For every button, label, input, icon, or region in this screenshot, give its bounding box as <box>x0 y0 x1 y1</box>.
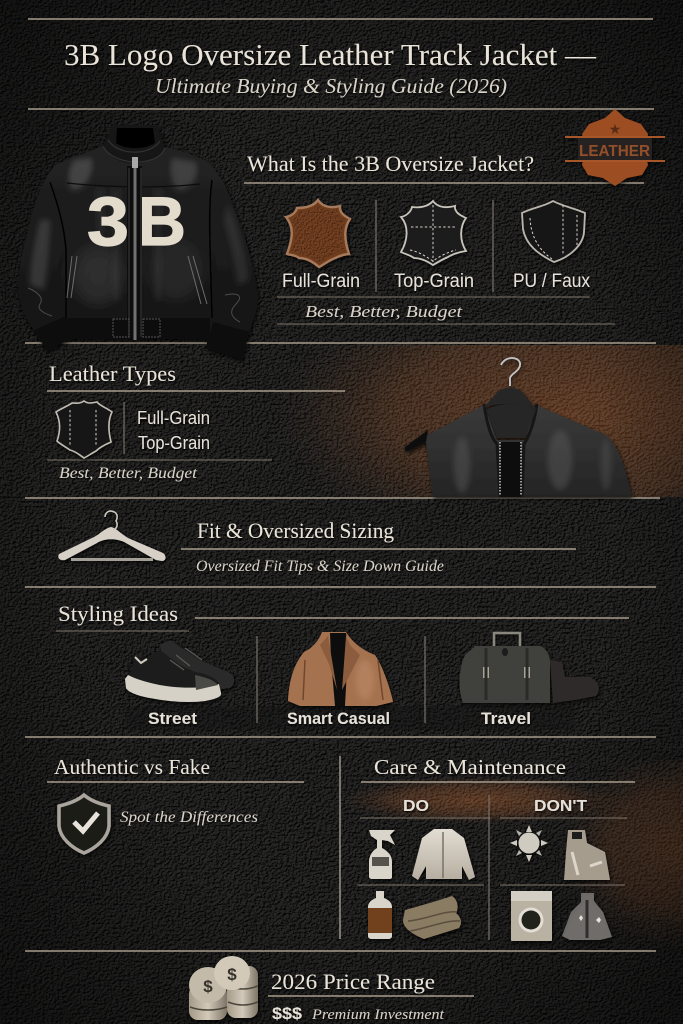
icon: coin stacks: $ <box>203 977 213 996</box>
leather types list <box>56 401 210 458</box>
label: travel: Travel <box>481 709 531 728</box>
icon: plastic cover <box>562 893 612 940</box>
caption: best better budget: Best, Better, Budget <box>59 465 198 482</box>
heading: price range: 2026 Price Range <box>271 969 435 994</box>
leather badge: LEATHER <box>579 143 650 160</box>
styling ideas row <box>125 632 599 730</box>
heading: care and maintenance: Care & Maintenance <box>374 755 566 779</box>
icon: check shield <box>59 795 109 853</box>
icon: plastic bag <box>564 830 610 880</box>
heading: styling ideas: Styling Ideas <box>58 601 178 626</box>
label: full-grain: Full-Grain <box>282 271 360 292</box>
icon: folded towel <box>403 896 461 939</box>
care grid <box>357 795 627 941</box>
label: pu faux: PU / Faux <box>513 271 590 292</box>
3B logo <box>87 183 186 260</box>
caption: fit tips: Oversized Fit Tips & Size Down Guide <box>196 558 444 575</box>
label: top-grain: Top-Grain <box>394 271 474 292</box>
heading: what is the jacket: What Is the 3B Oversize Jacket? <box>247 151 534 176</box>
icon: washing machine <box>511 891 552 941</box>
icon: sun <box>510 825 548 862</box>
icon: PU faux shield <box>522 201 585 262</box>
icon: coin stacks <box>189 956 258 1020</box>
label: street: Street <box>148 709 197 728</box>
icon: tan blazer <box>288 632 393 706</box>
icon: duffel bag <box>459 633 599 703</box>
label: full-grain: Full-Grain <box>137 408 210 428</box>
3B logo: B <box>137 183 186 260</box>
caption: best better budget: Best, Better, Budget <box>305 302 463 321</box>
jacket on hanger <box>405 358 632 497</box>
icon: conditioner bottle <box>368 891 392 939</box>
leather type icons row <box>282 200 590 292</box>
heading: leather types: Leather Types <box>49 361 176 386</box>
icon: full-grain hide <box>286 200 350 267</box>
price symbols: $$$ <box>272 1004 303 1023</box>
title <box>64 37 597 98</box>
label: smart casual: Smart Casual <box>287 709 390 728</box>
heading: fit and sizing: Fit & Oversized Sizing <box>197 518 394 543</box>
icon: sneakers <box>125 640 234 702</box>
label: top-grain: Top-Grain <box>138 433 210 453</box>
icon: spray bottle <box>369 830 395 879</box>
icon: light jacket <box>412 829 475 880</box>
leather jacket with 3B logo <box>18 125 258 360</box>
icon: top-grain hide <box>401 201 466 265</box>
label: don't: DON'T <box>534 798 587 815</box>
icon: coin stacks: $ <box>227 965 237 984</box>
subtitle: Ultimate Buying & Styling Guide (2026) <box>155 74 507 98</box>
leather badge <box>565 109 665 186</box>
title: 3B Logo Oversize Leather Track Jacket — <box>64 37 597 72</box>
caption: premium investment: Premium Investment <box>311 1007 445 1023</box>
heading: authentic vs fake: Authentic vs Fake <box>54 755 210 779</box>
caption: spot the differences: Spot the Differences <box>120 809 258 826</box>
leather badge: ★ <box>609 122 621 138</box>
3B logo: 3 <box>87 183 129 260</box>
icon: leather outline <box>56 401 112 458</box>
label: do: DO <box>403 798 429 815</box>
icon: clothes hanger <box>58 511 166 561</box>
